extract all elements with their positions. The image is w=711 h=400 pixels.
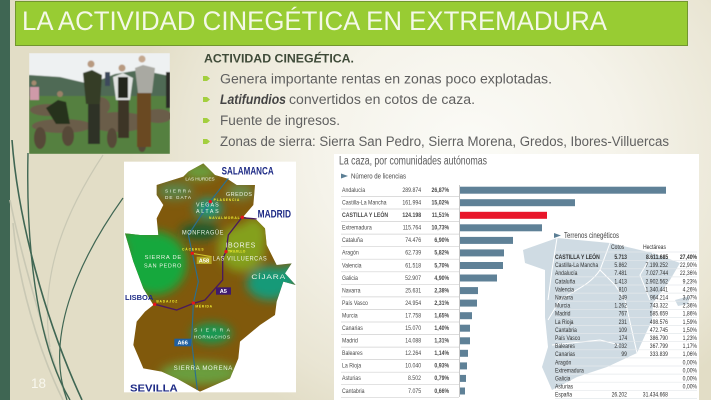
hunting land table: Cantabria (555, 327, 578, 334)
bullet 2: Latifundios (220, 92, 286, 107)
licences table and bars: 25.631 (405, 288, 422, 295)
hunting land table: Galicia (555, 376, 571, 383)
licences table and bars: 0,79% (434, 376, 450, 382)
hunting land table: 964.214 (650, 295, 669, 302)
licences table and bars: 124.198 (402, 213, 422, 219)
licences table and bars: 26,87% (432, 188, 450, 194)
hunting land table: 767 (619, 311, 627, 318)
city labels: SALAMANCA (222, 165, 274, 177)
legend heading: licences: Número de licencias (351, 172, 406, 180)
bullet 3: Fuente de ingresos. (220, 113, 340, 128)
licences table and bars: CASTILLA Y LEÓN (342, 210, 388, 219)
road signs: A5 (220, 289, 227, 295)
city labels: TRUJILLO (228, 250, 246, 254)
city labels: MÉRIDA (195, 304, 213, 309)
licences table and bars: 74.476 (405, 238, 422, 244)
city labels: PLASENCIA (214, 198, 240, 202)
hunting land table: 2.032 (614, 344, 627, 350)
licences table and bars: Andalucía (342, 188, 366, 194)
hunting land table: 1,06% (683, 352, 697, 358)
hunting land table: 8.611.685 (646, 255, 669, 261)
icon: section triangle licences (341, 174, 348, 178)
city labels: MADRID (258, 208, 291, 220)
hunting land table: 174 (619, 336, 628, 342)
region labels: GREDOS (226, 192, 253, 198)
licences table and bars: Cataluña (342, 238, 363, 244)
hunting land table: 367.799 (650, 344, 668, 350)
bullet 2 (203, 92, 475, 107)
licences table and bars: 62.739 (405, 250, 422, 257)
hunting land table: Asturias (555, 384, 573, 391)
hunting land table: 810 (619, 287, 627, 294)
hunting land table: La Rioja (555, 319, 574, 326)
hunting land table: 0,00% (683, 384, 697, 391)
region labels: SIERRA (194, 328, 231, 334)
hunting land table: 1.262 (614, 303, 627, 310)
licences table and bars: 6,90% (434, 238, 450, 244)
region labels: SIERRA MORENA (174, 366, 233, 372)
hunting land table: Andalucía (555, 271, 578, 277)
licences table and bars: 11,51% (432, 213, 450, 219)
photo: hunters with deer trophies (29, 53, 172, 154)
map of Extremadura (120, 155, 300, 395)
hunting land table: Murcia (555, 303, 571, 310)
region labels (144, 177, 286, 372)
hunting land table: 231 (619, 319, 627, 326)
licences table and bars: 8.502 (408, 376, 421, 382)
licences table and bars: 2,31% (434, 300, 450, 307)
hunting land table: Cataluña (555, 279, 576, 286)
hunting land table: 386.790 (650, 336, 668, 342)
region labels: SIERRA DE (145, 255, 182, 261)
hunting land table: 27,40% (680, 255, 697, 261)
licences table and bars: 1,65% (434, 313, 450, 320)
region labels: IBORES (225, 242, 256, 249)
licences table and bars: 10.040 (405, 363, 422, 370)
city labels: BADAJOZ (156, 300, 177, 304)
city labels: SEVILLA (130, 384, 178, 395)
city labels: NAVALMORAL (209, 216, 240, 220)
region labels: LAS VILLUERCAS (213, 255, 267, 262)
licences table and bars: 15.070 (405, 326, 422, 332)
hunting land table: 2,36% (683, 303, 697, 310)
title text: LA ACTIVIDAD CINEGÉTICA EN EXTREMADURA (22, 6, 607, 36)
hunting land table: 7.027.744 (646, 271, 669, 277)
hunting land table: 5.862 (614, 263, 627, 269)
licences table and bars: Madrid (342, 338, 358, 345)
hunting land table: Cotos (611, 245, 624, 251)
hunting land table (555, 245, 697, 399)
city labels: LISBOA (125, 293, 154, 302)
hunting land table: Aragón (555, 360, 571, 367)
hunting land table: CASTILLA Y LEÓN (555, 252, 600, 261)
region labels: SAN PEDRO (144, 263, 182, 269)
hunting land table: Extremadura (555, 368, 585, 375)
road signs (174, 257, 231, 346)
licences table and bars: 5,70% (434, 263, 450, 270)
licences table and bars: 1,31% (434, 338, 450, 345)
hunting land table: Baleares (555, 344, 575, 350)
licences table and bars: Extremadura (342, 225, 372, 232)
bullet 4: Zonas de sierra: Sierra San Pedro, Sierra Morena, Gredos, Ibores-Villuercas (220, 134, 669, 149)
left dark green strip (0, 0, 10, 400)
licences table and bars: Canarias (342, 326, 363, 332)
licences table and bars: 2,38% (434, 288, 450, 295)
hunting land table: 22,90% (680, 263, 697, 269)
road A58 (192, 253, 212, 257)
licences table and bars: 4,90% (434, 275, 450, 282)
licences table and bars: 289.874 (402, 188, 422, 194)
hunting land table: 498.576 (650, 319, 668, 326)
licences table and bars (341, 185, 666, 397)
region labels: VEGAS (196, 203, 219, 209)
hunting land table: 9,23% (683, 279, 697, 286)
hunting land table: 26.202 (612, 392, 627, 399)
licences table and bars: 0,93% (434, 363, 450, 370)
licences table and bars: 24.954 (405, 300, 422, 307)
road A5 (155, 218, 257, 310)
licences table and bars: 52.907 (405, 275, 421, 282)
licences table and bars: 10,73% (432, 225, 450, 232)
hunting land table: 7.481 (614, 271, 627, 277)
licences table and bars: Aragón (342, 250, 359, 257)
hunting land table: 31.434.668 (643, 392, 668, 399)
licences table and bars: 17.758 (405, 313, 422, 320)
hunting land table: 2.902.562 (646, 279, 668, 286)
hunting land table: 1.340.441 (646, 287, 668, 294)
region labels: ALTAS (196, 209, 219, 215)
licences table and bars: Murcia (342, 313, 358, 320)
licences table and bars: 115.764 (403, 225, 422, 232)
hunting land table: 249 (619, 295, 627, 302)
region labels: LAS HURDES (185, 177, 215, 182)
hunting land table: 4,26% (683, 287, 697, 294)
licences table and bars: Navarra (342, 288, 361, 295)
licences table and bars: 1,14% (434, 351, 450, 357)
bullet 1: Genera importante rentas en zonas poco explotadas. (220, 72, 552, 86)
city labels (125, 165, 291, 395)
legend heading: hunting land: Terrenos cinegéticos (564, 231, 619, 240)
licences table and bars: Castilla-La Mancha (342, 200, 387, 207)
hunting land table: 333.839 (650, 352, 668, 358)
hunting land table: Canarias (555, 352, 575, 358)
hunting land table: Navarra (555, 295, 574, 302)
road signs: A66 (177, 340, 188, 346)
road signs: A58 (199, 258, 209, 264)
city labels: CÁCERES (182, 246, 204, 251)
licences table and bars: Cantabria (342, 388, 365, 395)
hunting land table: 22,36% (680, 271, 697, 277)
licences table and bars: 5,82% (434, 250, 450, 257)
title banner (16, 2, 688, 46)
hunting land table: 585.659 (650, 311, 668, 318)
hunting land table: 0,00% (683, 376, 697, 383)
region labels: MONFRAGÜE (182, 228, 224, 236)
hunting land table: 0,00% (683, 368, 697, 375)
hunting land table: 99 (621, 352, 627, 358)
licences table and bars: Valencia (342, 263, 362, 270)
text block: hunting activity (203, 52, 669, 149)
road A66 (188, 178, 228, 390)
hunting land table: 1,86% (683, 311, 697, 318)
hunting land table: Castilla-La Mancha (555, 263, 599, 269)
hunting land table: 1.413 (614, 279, 627, 286)
hunting land table: 1,17% (683, 344, 697, 350)
hunting land table: Valencia (555, 287, 575, 294)
hunting land table: 743.322 (650, 303, 668, 310)
hunting land table: 1,23% (683, 336, 697, 342)
hunting land table: 5.713 (614, 255, 627, 261)
region labels: HORNACHOS (194, 335, 231, 340)
licences table and bars: 0,66% (434, 388, 450, 395)
licences table and bars: País Vasco (342, 300, 369, 307)
licences table and bars: 1,40% (434, 326, 450, 332)
licences table and bars: Galicia (342, 275, 359, 282)
chart title: La caza, por comunidades autónomas (339, 156, 487, 168)
slide number: 18 (31, 375, 46, 391)
hunting land table: 109 (619, 327, 627, 334)
hunting land table: 1,50% (683, 327, 697, 334)
icon: section triangle hunting land (554, 233, 561, 238)
region labels: SIERRA (165, 189, 192, 194)
licences table and bars: 61.518 (405, 263, 422, 270)
licences table and bars: Baleares (342, 351, 363, 357)
hunting land table: 1,59% (683, 319, 697, 326)
licences table and bars: Asturias (342, 376, 361, 382)
region labels: DE GATA (165, 195, 192, 200)
licences table and bars: 161.994 (402, 200, 422, 207)
chart panel: hunting by autonomous community (334, 154, 699, 400)
hunting land table: España (555, 392, 573, 399)
region labels: CÍJARA (251, 272, 286, 281)
Spain map background (523, 238, 690, 390)
licences table and bars: 14.088 (405, 338, 422, 345)
hunting land table: Hectáreas (643, 245, 666, 251)
hunting land table: 0,00% (683, 360, 697, 367)
bullet 2: convertidos en cotos de caza. (289, 92, 475, 107)
licences table and bars: 7.075 (408, 388, 422, 395)
hunting land table: 472.745 (650, 327, 668, 334)
licences table and bars: 12.264 (405, 351, 422, 357)
hunting land table: 7.199.252 (646, 263, 668, 269)
hunting land table: Madrid (555, 311, 570, 318)
licences table and bars: 15,02% (432, 200, 450, 207)
hunting land table: País Vasco (555, 336, 580, 342)
licences table and bars: La Rioja (342, 363, 362, 370)
hunting land table: 3,07% (683, 295, 697, 302)
subheading: ACTIVIDAD CINEG ÉTICA. (204, 52, 354, 66)
